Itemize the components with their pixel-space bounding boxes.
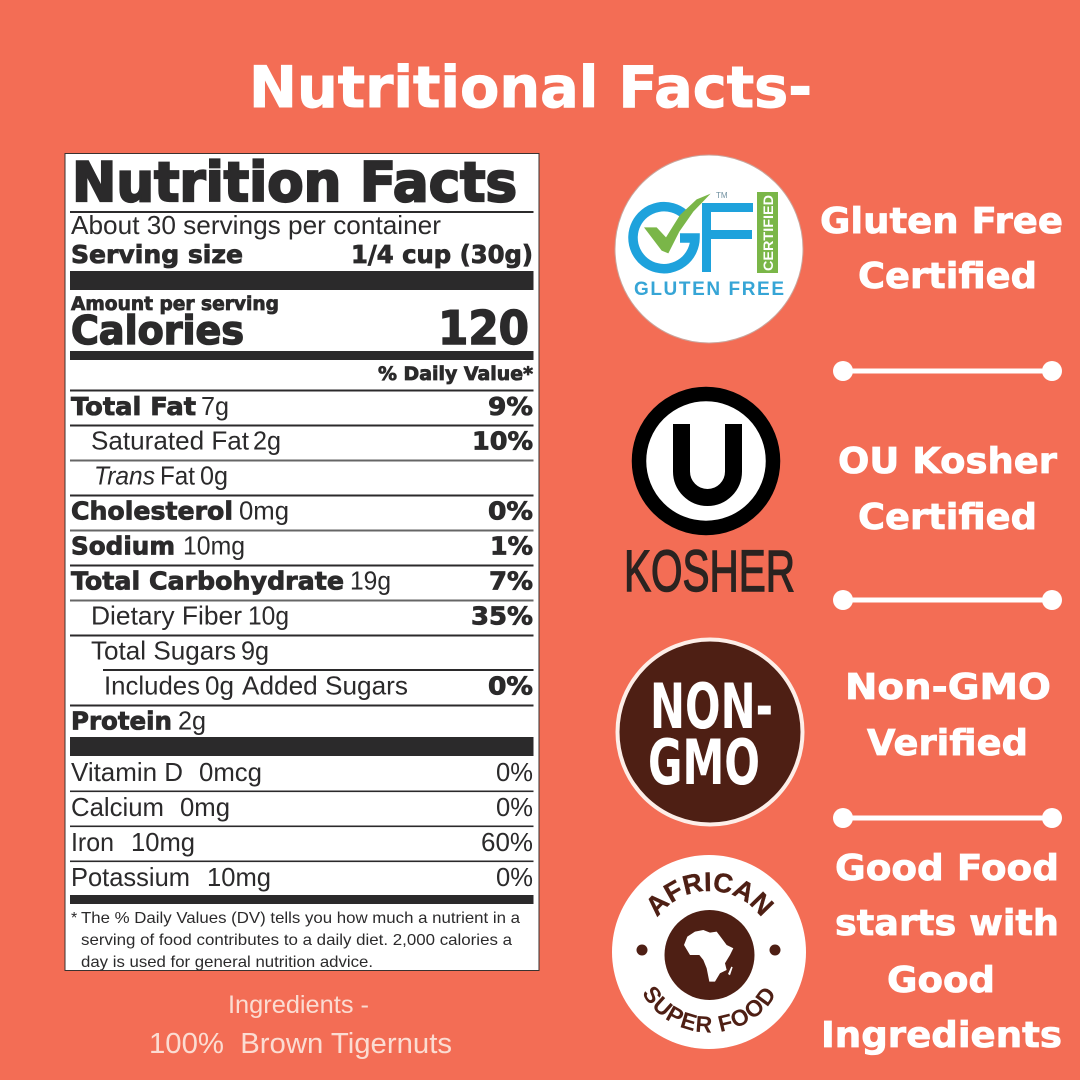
- label: Good Food starts with Good Ingredients: [821, 848, 1062, 1056]
- nutrient rows: Fat: [160, 460, 196, 490]
- nutrient rows: 10g: [248, 600, 289, 630]
- nutrient rows: 10mg: [183, 530, 245, 560]
- icon: Non-GMO badge: [618, 640, 802, 824]
- icon: Non-GMO badge: NON-: [650, 670, 773, 743]
- vitamins and minerals rows: Potassium: [71, 862, 190, 892]
- vitamins and minerals rows: 0%: [496, 862, 533, 892]
- icon: Gluten Free Certified badge: [615, 155, 803, 343]
- label: OU Kosher Certified: Certified: [858, 497, 1037, 538]
- nutrient rows: [70, 391, 534, 756]
- footnote: *: [71, 910, 77, 927]
- vitamins and minerals rows: [70, 757, 534, 904]
- title: Nutritional Facts-: [249, 55, 812, 121]
- nutrient rows: 0mg: [239, 496, 289, 526]
- certified bar: CERTIFIED: [760, 195, 776, 271]
- nutrient rows: Total Sugars: [91, 636, 236, 666]
- vitamins and minerals rows: 10mg: [131, 827, 195, 857]
- vitamins and minerals rows: 0%: [496, 757, 533, 787]
- nutrient rows: Added Sugars: [242, 670, 408, 700]
- nutrient rows: Saturated Fat: [91, 426, 250, 456]
- vitamins and minerals rows: Vitamin D: [71, 757, 183, 787]
- icon: Gluten Free Certified badge: GLUTEN FREE: [634, 279, 784, 300]
- certified bar: [757, 192, 778, 273]
- label: Gluten Free Certified: Certified: [858, 256, 1037, 297]
- label: OU Kosher Certified: OU Kosher: [838, 441, 1057, 482]
- nutrient rows: 0%: [488, 496, 533, 526]
- calories block: Calories: [71, 309, 244, 354]
- nutrient rows: 0%: [488, 672, 533, 700]
- vitamins and minerals rows: 0%: [496, 792, 533, 822]
- label: Gluten Free Certified: Gluten Free: [820, 201, 1063, 242]
- footnote: day is used for general nutrition advice.: [81, 954, 373, 971]
- vitamins and minerals rows: 60%: [481, 827, 533, 857]
- divider: [833, 361, 1062, 381]
- calories block: Amount per serving: [71, 294, 279, 315]
- icon: OU Kosher symbol: [624, 394, 795, 604]
- vitamins and minerals rows: 0mcg: [199, 757, 262, 787]
- footnote: serving of food contributes to a daily diet. 2,000 calories a: [81, 932, 512, 949]
- label: Good Food starts with Good Ingredients: Good Food: [835, 848, 1059, 889]
- servings block: [70, 210, 534, 290]
- panel: nutrition facts label: [65, 151, 539, 971]
- ingredients text: Ingredients -: [228, 991, 369, 1019]
- nutrient rows: 10%: [472, 426, 533, 456]
- nutrient rows: 7g: [201, 391, 229, 421]
- heading: Nutrition Facts: Nutrition Facts: [72, 151, 517, 214]
- nutrient rows: 35%: [471, 602, 533, 630]
- nutrient rows: 0g: [205, 670, 234, 700]
- nutrient rows: Sodium: [71, 532, 175, 560]
- icon: Gluten Free Certified badge: TM: [716, 191, 728, 200]
- divider: [833, 590, 1062, 610]
- label: Non-GMO Verified: Verified: [867, 723, 1028, 764]
- nutrient rows: Includes: [104, 670, 200, 700]
- nutrient rows: 7%: [489, 566, 533, 596]
- nutrient rows: 0g: [200, 460, 228, 490]
- label: Good Food starts with Good Ingredients: Good: [887, 960, 995, 1001]
- curved text: SUPER FOOD: SUPER FOOD: [644, 986, 774, 1033]
- icon: OU Kosher symbol: KOSHER: [624, 539, 795, 604]
- icon: Non-GMO badge: GMO: [648, 726, 760, 799]
- servings block: 1/4 cup (30g): [351, 240, 533, 269]
- calories block: [70, 294, 534, 392]
- ingredients text: 100% Brown Tigernuts: [149, 1028, 452, 1060]
- servings block: About 30 servings per container: [71, 210, 441, 240]
- G letter: [633, 207, 695, 269]
- calories block: 120: [438, 301, 529, 355]
- nutrient rows: 1%: [490, 532, 533, 560]
- servings block: Serving size: [71, 240, 243, 269]
- footnote: The % Daily Values (DV) tells you how much a nutrient in a: [81, 910, 520, 927]
- label: Non-GMO Verified: [845, 667, 1051, 764]
- label: OU Kosher Certified: [838, 441, 1057, 538]
- label: Good Food starts with Good Ingredients: Ingredients: [821, 1015, 1062, 1056]
- check mark: [644, 194, 711, 253]
- vitamins and minerals rows: 10mg: [207, 862, 271, 892]
- nutrient rows: Dietary Fiber: [91, 600, 242, 630]
- F letter: [702, 203, 753, 272]
- curved text: AFRICAN: AFRICAN: [648, 872, 774, 918]
- nutrient rows: Cholesterol: [71, 496, 233, 526]
- africa map: [684, 930, 733, 982]
- divider: [833, 808, 1062, 828]
- vitamins and minerals rows: Iron: [71, 827, 114, 857]
- nutrient rows: 9%: [488, 392, 533, 421]
- nutrient rows: Protein: [71, 706, 172, 736]
- label: Non-GMO Verified: Non-GMO: [845, 667, 1051, 708]
- calories block: % Daily Value*: [378, 364, 533, 385]
- nutrient rows: 19g: [350, 566, 391, 596]
- vitamins and minerals rows: 0mg: [180, 792, 230, 822]
- label: Good Food starts with Good Ingredients: starts with: [835, 903, 1059, 944]
- footnote: [71, 910, 520, 971]
- nutrient rows: 2g: [178, 706, 206, 736]
- icon: African Super Food badge: [612, 855, 806, 1049]
- nutrient rows: Trans: [94, 460, 155, 490]
- nutrient rows: Total Carbohydrate: [71, 566, 344, 596]
- nutrient rows: Total Fat: [71, 392, 196, 421]
- label: Gluten Free Certified: [820, 201, 1063, 297]
- vitamins and minerals rows: Calcium: [71, 792, 164, 822]
- nutrient rows: 2g: [253, 426, 281, 456]
- ingredients text: [149, 991, 452, 1060]
- nutrient rows: 9g: [241, 636, 269, 666]
